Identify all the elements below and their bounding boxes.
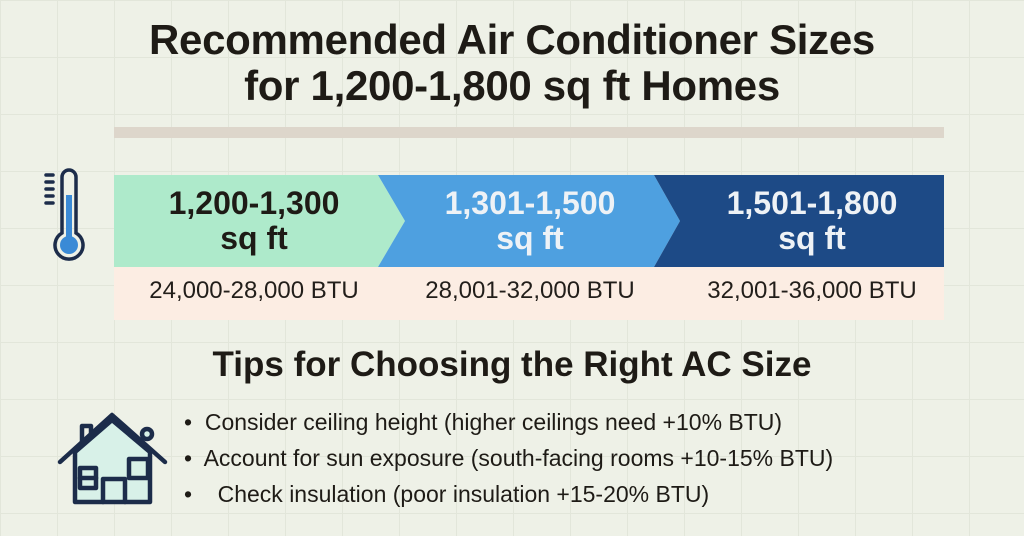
segment 2 label xyxy=(445,185,615,256)
divider bar xyxy=(114,127,944,138)
tips list: • Consider ceiling height (higher ceilings need +10% BTU) xyxy=(184,409,782,435)
size table xyxy=(114,175,944,320)
tips list: • Check insulation (poor insulation +15-20% BTU) xyxy=(184,481,709,507)
icon: house xyxy=(58,412,168,504)
segment 1 label: sq ft xyxy=(220,220,288,256)
segment 1 label: 1,200-1,300 xyxy=(169,185,339,221)
title: Recommended Air Conditioner Sizes xyxy=(149,16,875,63)
segment 3 label: sq ft xyxy=(778,220,846,256)
icon: thermometer xyxy=(44,168,85,261)
segment 2 label: sq ft xyxy=(496,220,564,256)
segment 3 label xyxy=(727,185,897,256)
segment 3 label: 1,501-1,800 xyxy=(727,185,897,221)
btu 2: 28,001-32,000 BTU xyxy=(425,277,635,304)
btu 3: 32,001-36,000 BTU xyxy=(707,277,917,304)
segment 2 label: 1,301-1,500 xyxy=(445,185,615,221)
tips list xyxy=(184,409,833,507)
segment 1 label xyxy=(169,185,339,256)
title xyxy=(149,16,875,109)
tips list: • Account for sun exposure (south-facing rooms +10-15% BTU) xyxy=(184,445,833,471)
title: for 1,200-1,800 sq ft Homes xyxy=(244,62,780,109)
tips heading: Tips for Choosing the Right AC Size xyxy=(213,345,811,384)
btu 1: 24,000-28,000 BTU xyxy=(149,277,359,304)
